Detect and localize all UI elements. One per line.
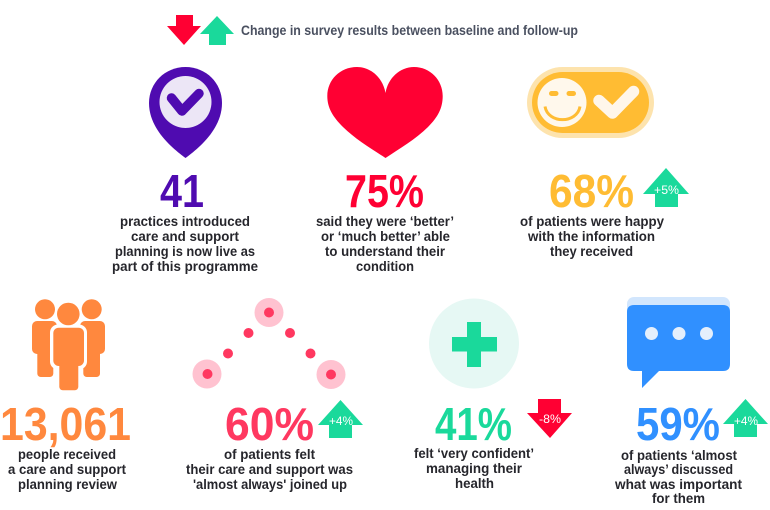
change arrow: -8% (527, 399, 572, 438)
panel: care reviews (0, 299, 131, 492)
change arrow: +4%: +4% (734, 414, 758, 428)
panel: understanding (316, 67, 454, 274)
description: part of this programme (112, 258, 258, 274)
description: to understand their (325, 243, 446, 259)
number: 59%: 59% (636, 398, 720, 450)
description (316, 213, 454, 274)
description: condition (356, 258, 414, 274)
description: a care and support (8, 461, 126, 477)
description: felt ‘very confident’ (414, 445, 534, 461)
panel: confidence (414, 298, 572, 491)
description: for them (652, 490, 705, 506)
legend (167, 15, 578, 45)
number: 13,061: 13,061 (0, 398, 131, 450)
panel: discussion (614, 297, 768, 506)
description (614, 447, 742, 506)
description (520, 213, 664, 259)
description: planning review (18, 476, 117, 492)
icon: group of people (32, 299, 105, 394)
change arrow: -8%: -8% (539, 412, 561, 426)
description: 'almost always' joined up (193, 476, 347, 492)
description: what was important (614, 476, 742, 492)
change arrow: +5%: +5% (654, 183, 679, 197)
panel: information (520, 67, 689, 259)
description: managing their (426, 460, 523, 476)
change arrow: +5% (643, 168, 689, 207)
description: said they were ‘better’ (316, 213, 454, 229)
description: people received (18, 446, 116, 462)
change arrow: +4% (318, 400, 363, 438)
description: with the information (527, 228, 655, 244)
description: care and support (131, 228, 239, 244)
number: 60%: 60% (225, 398, 314, 450)
description (186, 446, 353, 492)
panel: practices (112, 67, 258, 274)
change arrow: +4%: +4% (329, 414, 353, 428)
description: of patients were happy (520, 213, 664, 229)
description: they received (550, 243, 633, 259)
description (414, 445, 534, 491)
icon: medical plus (429, 298, 519, 388)
description: always’ discussed (624, 461, 733, 477)
description: of patients ‘almost (621, 447, 737, 463)
description (8, 446, 126, 492)
icon: heart (327, 67, 443, 158)
description: practices introduced (120, 213, 250, 229)
icon: legend down arrow (167, 15, 201, 45)
description: health (455, 475, 494, 491)
icon: smiley and check badge (527, 67, 654, 138)
icon: legend up arrow (200, 16, 234, 45)
description: of patients felt (224, 446, 315, 462)
number: 41%: 41% (435, 398, 512, 450)
description: planning is now live as (115, 243, 255, 259)
description: their care and support was (186, 461, 353, 477)
legend text: Change in survey results between baseline and follow-up (241, 23, 578, 38)
icon: location pin with check (149, 67, 222, 158)
icon: connected dots (192, 298, 346, 389)
icon: speech bubble (627, 297, 730, 388)
description (112, 213, 258, 274)
change arrow: +4% (723, 399, 768, 437)
number: 75%: 75% (345, 165, 424, 217)
description: or ‘much better’ able (321, 228, 450, 244)
number: 41: 41 (160, 165, 204, 217)
panel: joined up care (186, 298, 363, 492)
number: 68%: 68% (549, 165, 634, 217)
